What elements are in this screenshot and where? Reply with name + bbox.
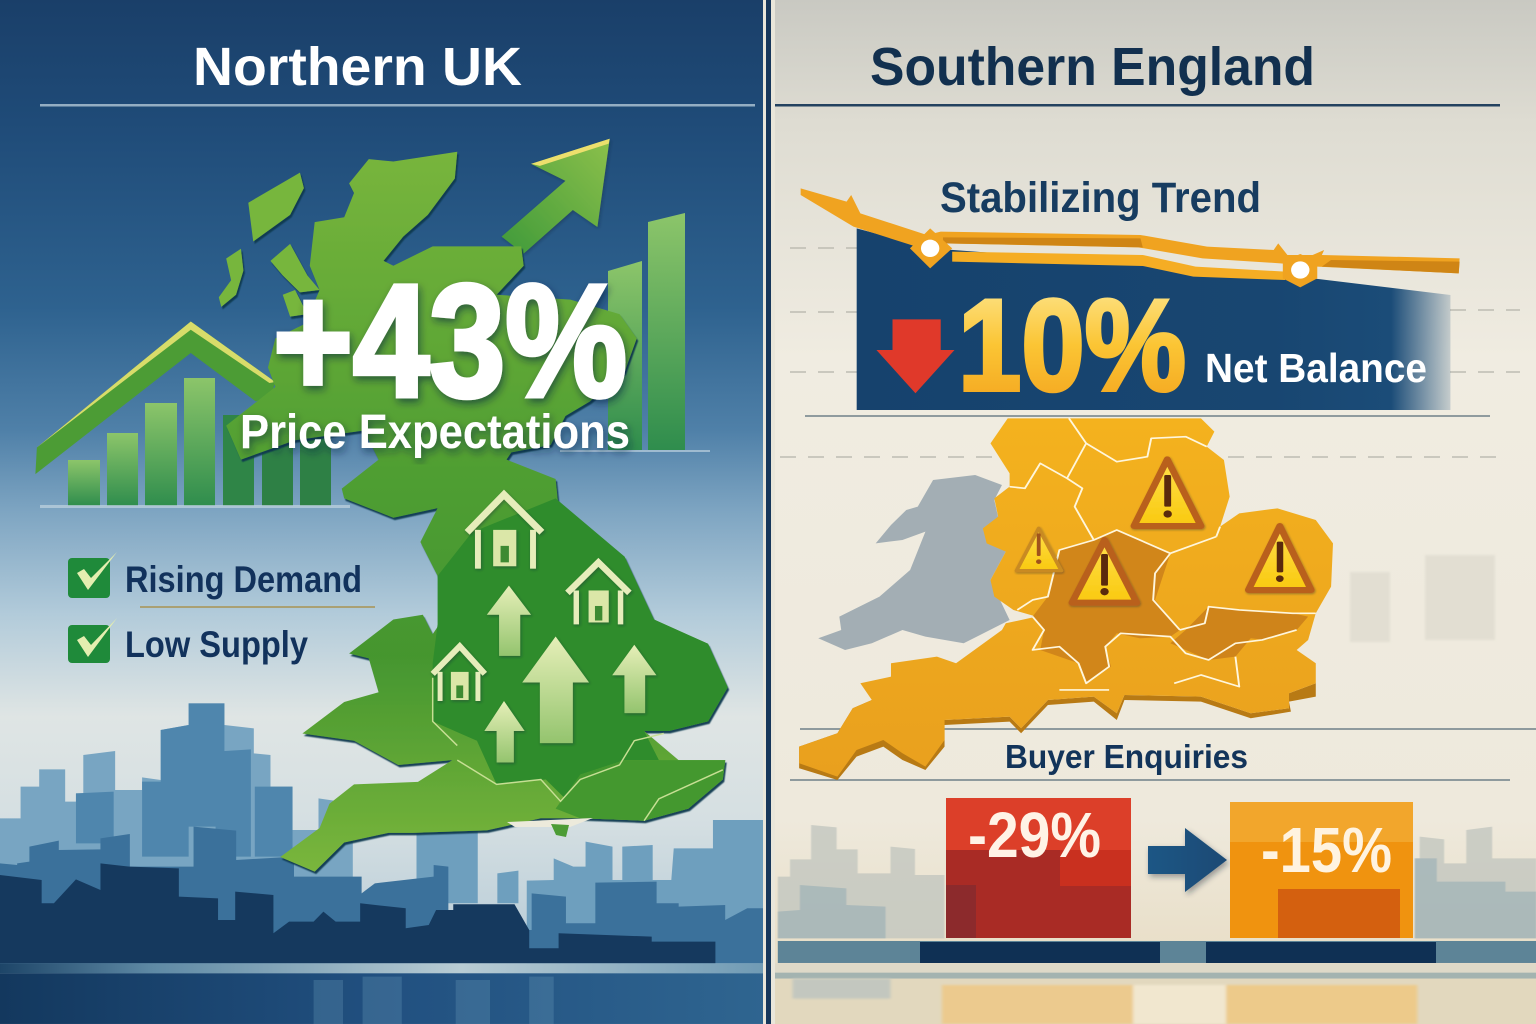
icon: rising green arrow	[502, 139, 610, 254]
label: Buyer Enquiries: Buyer Enquiries	[1005, 738, 1248, 775]
bottom reflection strip	[0, 963, 768, 973]
bar chart: right tall bars	[560, 213, 710, 452]
Hebrides	[219, 173, 320, 317]
icon: up arrow large	[522, 637, 589, 743]
card: -29%	[946, 798, 1131, 938]
icon: blue arrow	[1148, 828, 1227, 892]
panel: net balance banner	[801, 188, 1460, 418]
panel: Southern England	[772, 0, 1536, 1024]
skyline: south ghost towers	[1350, 555, 1495, 642]
southern shadow edge	[799, 683, 1316, 780]
item: Rising Demand: Rising Demand	[125, 559, 362, 600]
big stat: 10%: 10%	[958, 272, 1186, 418]
warning triangle west	[1017, 528, 1061, 571]
icon: house top	[467, 494, 542, 569]
label: Price Expectations: Price Expectations	[240, 406, 630, 459]
panel: Northern UK	[0, 0, 768, 1024]
warning triangle north	[1134, 459, 1201, 526]
card: -15%: -15%	[1261, 814, 1392, 886]
guide lines	[780, 248, 1536, 780]
heading: Northern UK: Northern UK	[193, 37, 522, 97]
warning triangle central	[1072, 540, 1137, 603]
divider under item	[140, 606, 375, 608]
card: -29%: -29%	[968, 799, 1101, 871]
region borders	[433, 678, 723, 821]
darker central England	[433, 498, 728, 804]
centre divider	[763, 0, 775, 1024]
icon: house right	[567, 562, 629, 624]
Isle of Wight with pale reflection	[507, 818, 593, 837]
icon: house left	[433, 646, 485, 701]
warning triangle east	[1248, 526, 1311, 590]
card: -15%	[1230, 802, 1413, 938]
icon: check 2	[68, 618, 117, 663]
skyline: south	[778, 825, 1536, 938]
banner background	[857, 228, 1450, 410]
icon: up arrow right	[612, 645, 656, 713]
map: green UK with roof and arrows	[35, 139, 728, 872]
south-east England	[556, 760, 725, 821]
icon: up arrow lower	[484, 701, 525, 763]
line chart: stabilizing trend	[801, 188, 1460, 287]
bar chart: left rising bars	[40, 378, 350, 508]
base bars	[920, 942, 1436, 963]
icon: up arrow upper	[487, 586, 531, 656]
Great Britain mainland	[226, 152, 728, 872]
icon: red down arrow	[876, 319, 954, 393]
Wales silhouette	[818, 475, 1010, 650]
skyline: north	[0, 703, 768, 1024]
map: Southern England	[799, 418, 1333, 780]
heading: Southern England: Southern England	[870, 37, 1315, 97]
big stat: +43%: +43%	[273, 251, 627, 430]
England mainland	[799, 418, 1333, 777]
label: Stabilizing Trend: Stabilizing Trend	[940, 174, 1261, 222]
map outline	[219, 152, 728, 872]
icon: roof chevron	[35, 321, 275, 474]
checklist	[68, 552, 375, 665]
label: Net Balance: Net Balance	[1205, 345, 1427, 391]
darker central regions	[1033, 530, 1180, 683]
icon: check 1	[68, 552, 117, 598]
region borders	[1010, 418, 1316, 690]
item: Low Supply: Low Supply	[125, 624, 308, 665]
base band and floor reflection	[775, 941, 1536, 1024]
